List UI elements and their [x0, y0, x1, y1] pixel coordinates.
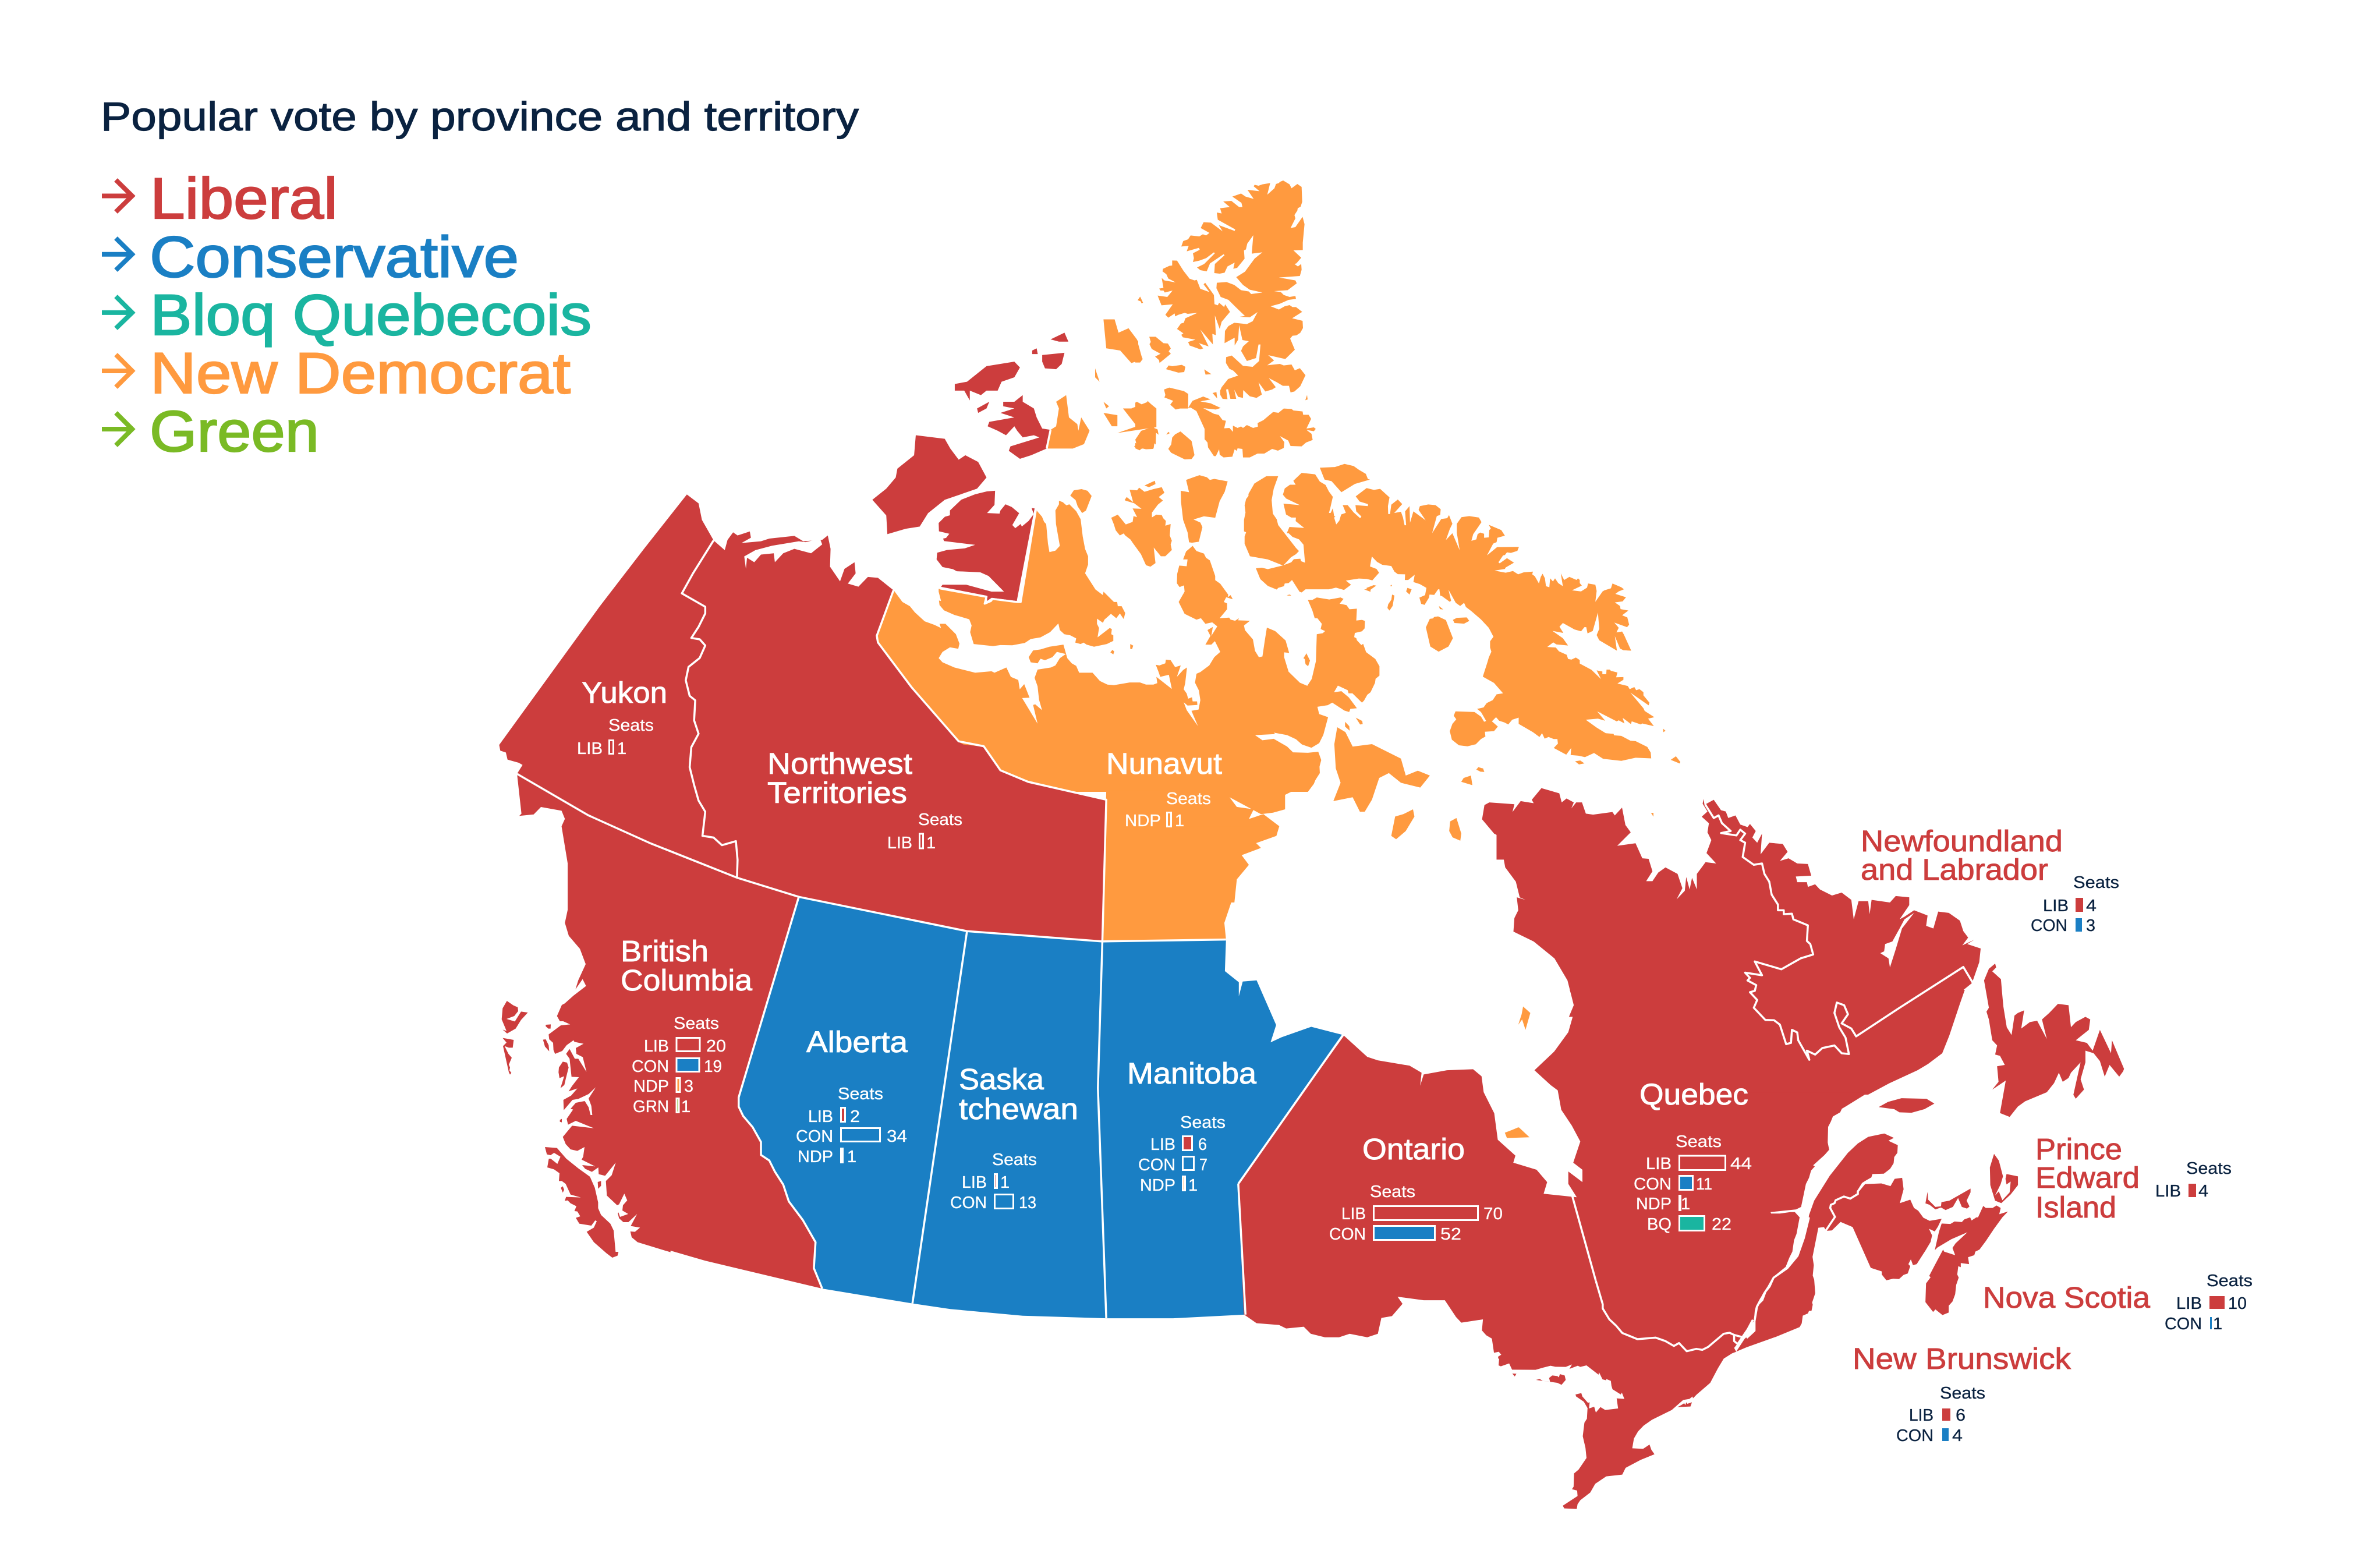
- label: Ontario: 70: [1483, 1205, 1503, 1223]
- region: Quebec and Labrador north: [1482, 788, 1981, 1017]
- label: Nova Scotia: LIB: [2176, 1294, 2202, 1313]
- label: Quebec: [1634, 1078, 1752, 1234]
- label: British Columbia: NDP: [633, 1077, 669, 1096]
- label: Quebec: 11: [1696, 1175, 1712, 1194]
- label: Newfoundland and Labrador: LIB: [2043, 897, 2069, 915]
- label: New Brunswick: CON: [1896, 1427, 1933, 1445]
- label: Yukon: Yukon: [582, 676, 667, 709]
- label: Prince Edward Island: LIB: [2155, 1182, 2181, 1201]
- label: British Columbia: 1: [681, 1098, 690, 1116]
- label: New Brunswick: 6: [1956, 1406, 1966, 1425]
- label: Manitoba: Manitoba: [1127, 1057, 1257, 1090]
- label: Saskatchewan: [950, 1063, 1078, 1212]
- label: Quebec: Quebec: [1639, 1078, 1748, 1111]
- label: Nunavut: NDP: [1125, 812, 1161, 830]
- label: Nova Scotia: 10: [2228, 1294, 2247, 1313]
- label: Saskatchewan: tchewan: [959, 1092, 1078, 1125]
- region: Nunavut: [877, 180, 1680, 1138]
- legend item: Liberal: Liberal: [150, 166, 338, 231]
- label: Saskatchewan: Saska: [959, 1063, 1044, 1096]
- region: Yukon: [499, 494, 738, 877]
- legend item: Green: Green: [150, 399, 319, 463]
- label: British Columbia: LIB: [644, 1037, 669, 1056]
- label: Quebec: 1: [1681, 1195, 1690, 1213]
- label: Northwest Territories: LIB: [887, 834, 912, 852]
- label: Prince Edward Island: Seats: [2186, 1159, 2232, 1178]
- label: Manitoba: 1: [1188, 1176, 1198, 1195]
- label: British Columbia: 3: [684, 1077, 693, 1096]
- label: Nova Scotia: [1983, 1272, 2253, 1333]
- label: Alberta: NDP: [798, 1148, 833, 1166]
- label: Yukon: Seats: [608, 716, 654, 735]
- label: New Brunswick: Seats: [1940, 1384, 1985, 1403]
- label: Alberta: 1: [847, 1148, 856, 1166]
- label: Quebec: LIB: [1646, 1155, 1672, 1173]
- label: Nunavut: [1106, 747, 1222, 830]
- region: Maritimes: [1736, 1098, 2018, 1351]
- label: Nunavut: 1: [1175, 812, 1184, 830]
- label: New Brunswick: [1853, 1342, 2071, 1445]
- label: Manitoba: LIB: [1150, 1135, 1175, 1154]
- label: Manitoba: 7: [1199, 1156, 1207, 1174]
- label: British Columbia: GRN: [633, 1098, 669, 1116]
- label: British Columbia: 19: [704, 1057, 722, 1076]
- label: Saskatchewan: Seats: [992, 1151, 1037, 1169]
- region: Ontario and southern Quebec: [1238, 990, 1965, 1509]
- label: Prince Edward Island: Edward: [2035, 1161, 2140, 1194]
- label: British Columbia: 20: [706, 1037, 726, 1056]
- label: Nunavut: Seats: [1166, 790, 1211, 808]
- region: Manitoba: [1098, 940, 1343, 1318]
- label: Quebec: NDP: [1636, 1195, 1672, 1213]
- label: Northwest Territories: Northwest: [767, 747, 912, 780]
- label: Northwest Territories: Territories: [767, 776, 907, 809]
- label: Manitoba: [1127, 1057, 1257, 1195]
- legend item: New Democrat: New Democrat: [150, 341, 571, 405]
- label: Saskatchewan: 13: [1019, 1194, 1036, 1212]
- label: Manitoba: CON: [1138, 1156, 1175, 1174]
- label: Northwest Territories: [767, 747, 962, 852]
- label: Nova Scotia: CON: [2165, 1315, 2202, 1333]
- label: Manitoba: Seats: [1180, 1113, 1226, 1132]
- legend: [102, 166, 592, 463]
- map of Canada: [499, 180, 2124, 1509]
- label: Newfoundland and Labrador: and Labrador: [1861, 853, 2048, 886]
- label: New Brunswick: LIB: [1909, 1406, 1933, 1425]
- label: Newfoundland and Labrador: CON: [2031, 916, 2067, 935]
- label: Ontario: 52: [1440, 1225, 1461, 1244]
- label: Ontario: Ontario: [1362, 1132, 1465, 1166]
- label: British Columbia: [621, 935, 753, 1116]
- label: Prince Edward Island: 4: [2198, 1182, 2208, 1201]
- label: Alberta: 2: [850, 1107, 860, 1126]
- label: Ontario: LIB: [1341, 1205, 1366, 1223]
- label: Newfoundland and Labrador: Newfoundland: [1861, 824, 2063, 858]
- label: Saskatchewan: 1: [1000, 1173, 1010, 1192]
- region: Saskatchewan: [912, 931, 1106, 1318]
- label: Nova Scotia: 1: [2213, 1315, 2222, 1333]
- region: Northwest Territories: [682, 332, 1106, 941]
- label: Newfoundland and Labrador: 4: [2086, 897, 2097, 915]
- label: Nova Scotia: Seats: [2207, 1272, 2253, 1290]
- label: Yukon: LIB: [577, 739, 603, 758]
- label: Yukon: [577, 676, 667, 758]
- label: Northwest Territories: 1: [926, 834, 936, 852]
- label: British Columbia: British: [621, 935, 709, 968]
- label: British Columbia: CON: [632, 1057, 669, 1076]
- label: Ontario: [1329, 1132, 1503, 1244]
- region: Alberta: [739, 897, 967, 1304]
- label: Quebec: 44: [1730, 1155, 1752, 1173]
- label: Saskatchewan: LIB: [962, 1173, 987, 1192]
- label: Quebec: CON: [1634, 1175, 1672, 1194]
- label: Saskatchewan: CON: [950, 1194, 987, 1212]
- label: Newfoundland and Labrador: 3: [2086, 916, 2095, 935]
- title: Popular vote by province and territory: [101, 94, 859, 139]
- label: Prince Edward Island: Prince: [2035, 1132, 2122, 1166]
- label: Alberta: LIB: [808, 1107, 833, 1126]
- label: Alberta: 34: [887, 1127, 907, 1146]
- label: Manitoba: 6: [1198, 1135, 1207, 1154]
- legend item: Bloq Quebecois: Bloq Quebecois: [150, 282, 592, 347]
- label: Manitoba: NDP: [1140, 1176, 1175, 1195]
- label: Alberta: Alberta: [806, 1025, 908, 1059]
- label: Alberta: Seats: [838, 1085, 883, 1103]
- label: Nunavut: Nunavut: [1106, 747, 1222, 780]
- label: Quebec: 22: [1712, 1215, 1731, 1234]
- provincial borders: [517, 430, 1973, 1351]
- label: Prince Edward Island: Island: [2035, 1191, 2116, 1224]
- label: Prince Edward Island: [2035, 1132, 2232, 1224]
- label: Nova Scotia: Nova Scotia: [1983, 1281, 2151, 1314]
- label: Newfoundland and Labrador: Seats: [2073, 873, 2119, 892]
- label: Quebec: Seats: [1676, 1132, 1722, 1151]
- label: Alberta: CON: [796, 1127, 833, 1146]
- region: British Columbia: [502, 774, 822, 1289]
- label: British Columbia: Seats: [674, 1014, 719, 1033]
- label: Ontario: Seats: [1370, 1183, 1415, 1201]
- region: Newfoundland: [1984, 964, 2124, 1117]
- label: Alberta: [796, 1025, 908, 1166]
- label: Ontario: CON: [1329, 1225, 1366, 1244]
- label: Newfoundland and Labrador: [1861, 824, 2119, 935]
- label: Quebec: BQ: [1647, 1215, 1672, 1234]
- label: Yukon: 1: [617, 739, 626, 758]
- label: New Brunswick: New Brunswick: [1853, 1342, 2071, 1375]
- legend item: Conservative: Conservative: [150, 225, 519, 289]
- label: Northwest Territories: Seats: [918, 810, 962, 829]
- label: British Columbia: Columbia: [621, 964, 753, 997]
- label: New Brunswick: 4: [1952, 1427, 1963, 1445]
